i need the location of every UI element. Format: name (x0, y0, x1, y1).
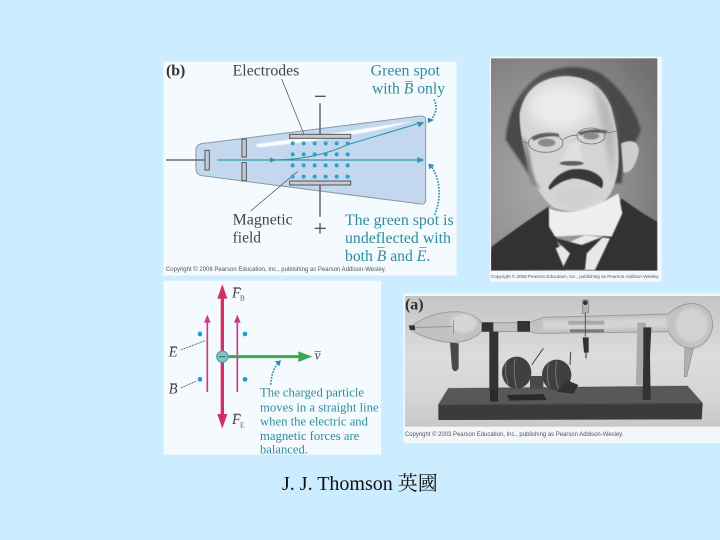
velocity arrow (223, 351, 312, 362)
collar (549, 193, 622, 237)
vector labels: E (168, 345, 178, 361)
moustache (548, 169, 603, 190)
panel: portrait of J. J. Thomson (490, 57, 662, 282)
callout text: when the electric and (260, 414, 369, 428)
panel: cathode ray tube diagram (b): Copyright © 2008 Pearson Education, Inc., publishing as Pearson Addison-Wesley. (166, 266, 386, 273)
lower lip and chin (555, 189, 595, 208)
dark tube bands (482, 322, 493, 332)
photo background (405, 296, 720, 427)
wires (166, 96, 326, 234)
caption: J. J. Thomson 英國 (282, 472, 438, 495)
force arrows (217, 284, 227, 429)
right stand (636, 323, 646, 385)
dotted callout arrows (431, 99, 439, 215)
vector labels: F (231, 285, 242, 301)
cathode electrode and tips (409, 325, 415, 330)
B field dots (198, 332, 247, 382)
panel: cathode ray tube diagram (b): field (233, 229, 261, 246)
labels: (b) (166, 63, 185, 80)
highlight on glass (255, 121, 413, 147)
vector labels (168, 285, 321, 428)
callout text: moves in a straight line (260, 400, 379, 414)
panel: cathode ray tube diagram (b): Green spot (371, 63, 441, 80)
beam paths (217, 123, 420, 160)
panel: force balance diagram: E (240, 420, 245, 429)
label a: (a) (405, 296, 424, 313)
tube body (196, 116, 426, 204)
panel: cathode ray tube diagram (b): Electrodes (233, 63, 299, 80)
hair (506, 67, 641, 183)
callout text: The charged particle (260, 386, 364, 400)
face shading (592, 83, 615, 183)
callout text (260, 386, 379, 456)
face and forehead (520, 76, 619, 211)
base board (438, 386, 703, 420)
glass tube (410, 303, 713, 349)
right tip (684, 347, 693, 377)
callout text: magnetic forces are (260, 429, 360, 443)
panel: cathode ray tube diagram (b) (163, 62, 457, 276)
infographic canvas (163, 56, 720, 492)
panel: cathode ray tube diagram (b): both B and E. (345, 248, 430, 265)
copyright: Copyright © 2003 Pearson Education, Inc., publishing as Pearson Addison-Wesley. (405, 431, 624, 438)
left stand (489, 332, 498, 390)
photo background (491, 58, 657, 271)
leader lines (251, 79, 304, 211)
panel: photo of Thomson's tube apparatus (a) (403, 293, 720, 443)
panel: force balance diagram: B (240, 294, 245, 303)
magnetic field dots (291, 141, 350, 179)
panel: portrait of J. J. Thomson: Copyright © 2008 Pearson Education, Inc., publishing as Pearson Addison-Wesley. (491, 273, 659, 280)
nose (562, 140, 584, 162)
central plates and stem (568, 321, 604, 325)
brow forehead highlight (528, 83, 592, 130)
panel: force balance diagram (163, 281, 381, 456)
charged particle (217, 351, 228, 362)
panel: cathode ray tube diagram (b): undeflected with (345, 230, 451, 247)
necktie (553, 237, 603, 270)
glass highlights (543, 317, 667, 330)
callout text: balanced. (260, 442, 308, 456)
cathode (205, 134, 351, 185)
panel: cathode ray tube diagram (b): The green spot is (345, 212, 454, 229)
vector labels: F (231, 412, 242, 428)
dotted callout (271, 364, 277, 385)
coat (491, 198, 657, 271)
electric field arrows (204, 315, 241, 392)
leaders (181, 341, 205, 388)
vector labels: v (315, 347, 321, 362)
ear (621, 141, 639, 173)
panel: cathode ray tube diagram (b): Magnetic (233, 211, 293, 228)
panel: cathode ray tube diagram (b): with B only (372, 81, 445, 98)
vector labels: B (169, 381, 178, 397)
eyes and spectacles (532, 133, 559, 141)
coils (502, 357, 531, 389)
